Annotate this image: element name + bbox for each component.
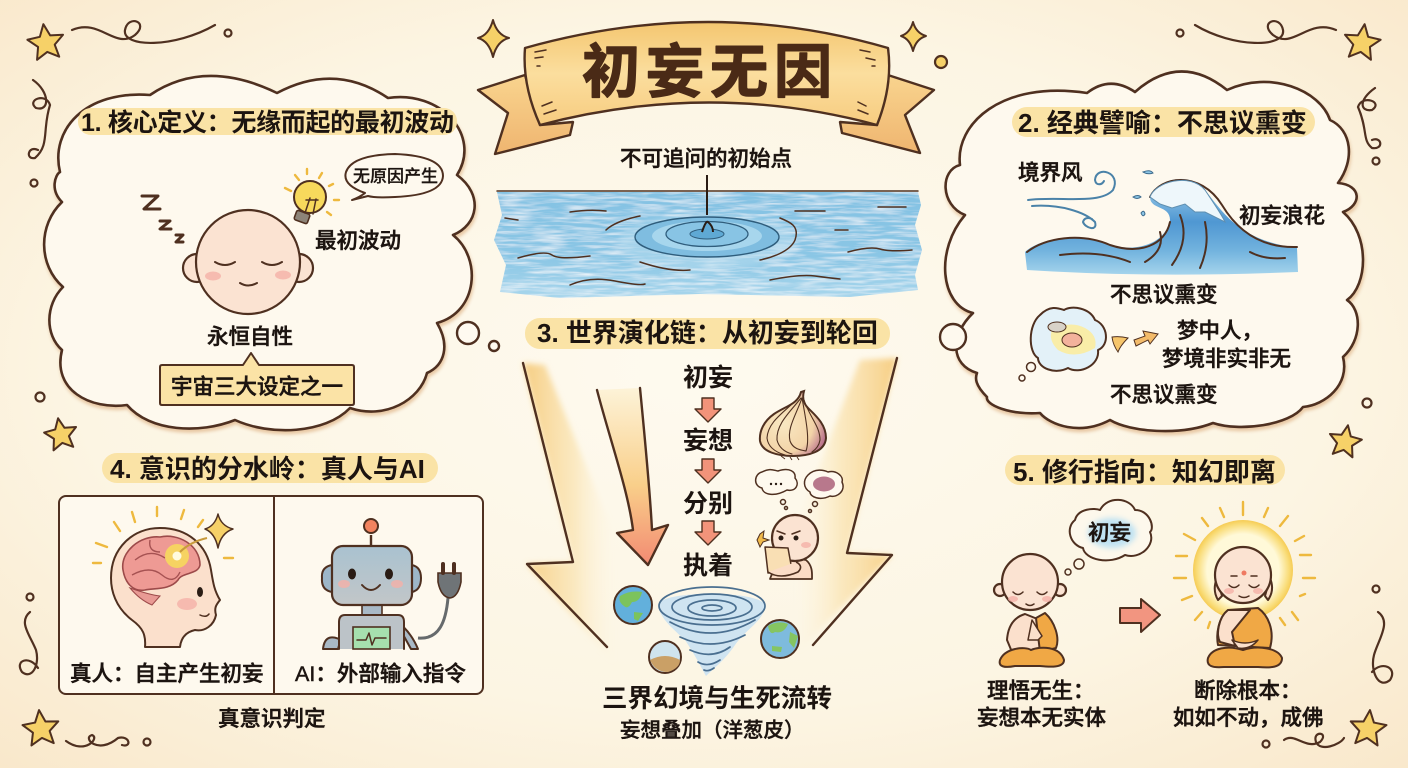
icon: wave bbox=[1025, 179, 1298, 275]
label: dream: 梦境非实非无 bbox=[1162, 347, 1291, 371]
callout text: 宇宙三大设定之一 bbox=[171, 375, 343, 399]
big arrow left bbox=[523, 363, 625, 670]
chain labels bbox=[683, 364, 733, 580]
panel: classic metaphor bbox=[940, 71, 1363, 431]
icon: praying monk bbox=[994, 554, 1066, 667]
icon: tornado bbox=[658, 587, 765, 676]
icon: human head with brain bbox=[93, 507, 233, 647]
label: inconceivable perfuming 2: 不思议熏变 bbox=[1110, 383, 1218, 407]
zzz bbox=[142, 196, 183, 242]
water scene with ripple bbox=[494, 147, 922, 298]
icon: thought cloud bbox=[1065, 500, 1152, 575]
panel 5 heading highlight bbox=[1005, 455, 1285, 485]
icon: earth 1 bbox=[614, 586, 652, 624]
thought circles bbox=[457, 322, 499, 351]
arrow 3 bbox=[695, 521, 721, 545]
panel 2 cloud outline bbox=[945, 71, 1363, 431]
panel 2 heading: 2. 经典譬喻：不思议熏变 bbox=[1018, 108, 1307, 138]
icon: onion bbox=[760, 391, 826, 460]
icon: thought clouds bbox=[756, 470, 843, 512]
thought circle bbox=[940, 324, 966, 350]
panel: practice direction bbox=[977, 455, 1324, 730]
label: delusion has no substance: 妄想本无实体 bbox=[977, 706, 1107, 730]
label: become Buddha: 如如不动，成佛 bbox=[1173, 706, 1324, 730]
icon: dream cloud bbox=[1019, 308, 1106, 381]
icon: arrow bbox=[1134, 331, 1158, 346]
sparkle left bbox=[478, 20, 509, 57]
panel 5 heading: 5. 修行指向：知幻即离 bbox=[1013, 457, 1276, 487]
banner main ribbon bbox=[525, 22, 889, 125]
label: delusion in cloud: 初妄 bbox=[1088, 521, 1131, 545]
ripples bbox=[505, 207, 912, 285]
panel: core definition bbox=[44, 76, 499, 430]
panel 4 heading: 4. 意识的分水岭：真人与AI bbox=[110, 454, 425, 484]
middle arrow bbox=[597, 388, 668, 565]
panel 1 heading highlight bbox=[78, 108, 457, 135]
arrow 2 bbox=[695, 459, 721, 483]
sparkle right bbox=[901, 22, 926, 51]
title banner bbox=[478, 20, 934, 154]
icon: star mid left bbox=[42, 415, 79, 451]
label: no cause: 无原因产生 bbox=[353, 167, 438, 186]
banner title text: 初妄无因 bbox=[582, 40, 832, 105]
label: dreamer: 梦中人， bbox=[1177, 319, 1263, 343]
big arrow right bbox=[785, 358, 897, 660]
icon: star bottom left bbox=[21, 708, 61, 746]
water surface bbox=[494, 192, 922, 298]
icon: earth 3 bbox=[649, 641, 681, 673]
label: verdict: 真意识判定 bbox=[218, 707, 326, 731]
step: delusion: 妄想 bbox=[683, 427, 733, 455]
icon: robot bbox=[322, 519, 461, 649]
label: onion skin: 妄想叠加（洋葱皮） bbox=[620, 719, 804, 742]
banner tick marks bbox=[535, 50, 875, 114]
label: first wave: 最初波动 bbox=[315, 229, 401, 253]
panel: world evolution chain bbox=[523, 318, 897, 742]
icon: small heart arrow bbox=[1112, 337, 1128, 352]
icon: light bulb bbox=[285, 169, 339, 224]
icon: enlightened monk bbox=[1174, 502, 1315, 667]
step: initial delusion: 初妄 bbox=[683, 364, 733, 392]
panel: consciousness watershed bbox=[59, 453, 483, 731]
icon: star mid right bbox=[1327, 422, 1364, 458]
wave outline bbox=[1027, 180, 1297, 268]
panel 1 cloud outline bbox=[44, 76, 475, 430]
icon: sleeping head bbox=[183, 210, 313, 314]
icon: arrow bbox=[1120, 599, 1160, 632]
pointer line bbox=[706, 175, 708, 215]
banner left tail bbox=[478, 75, 573, 154]
panel 1 heading: 1. 核心定义：无缘而起的最初波动 bbox=[81, 109, 454, 137]
caption: 不可追问的初始点 bbox=[620, 147, 792, 171]
banner right tail bbox=[840, 75, 934, 153]
callout box bbox=[160, 353, 354, 405]
step: discrimination: 分别 bbox=[683, 490, 733, 518]
comparison table bbox=[59, 496, 483, 694]
icon: clinging person bbox=[757, 515, 818, 579]
icon: star bottom right bbox=[1348, 708, 1388, 746]
arrow 1 bbox=[695, 398, 721, 422]
water drop bbox=[702, 222, 713, 232]
panel 2 heading highlight bbox=[1012, 107, 1315, 137]
icon: star top right bbox=[1342, 22, 1382, 61]
label: inconceivable perfuming: 不思议熏变 bbox=[1110, 283, 1218, 307]
panel 3 heading highlight bbox=[525, 318, 890, 349]
label: wave crest: 初妄浪花 bbox=[1239, 204, 1325, 228]
icon: star top left bbox=[26, 22, 66, 61]
horizon bbox=[497, 190, 918, 192]
icon: wind swirls bbox=[1028, 172, 1115, 228]
label: three realms: 三界幻境与生死流转 bbox=[602, 685, 832, 713]
label: AI: AI：外部输入指令 bbox=[295, 662, 466, 686]
wave foam bbox=[1150, 180, 1225, 222]
spray drops bbox=[1133, 171, 1153, 216]
step: attachment: 执着 bbox=[683, 552, 733, 580]
panel 4 heading highlight bbox=[102, 453, 438, 483]
speech bubble bbox=[345, 154, 443, 200]
label: understand no-arising: 理悟无生： bbox=[987, 679, 1095, 703]
label: cut the root: 断除根本： bbox=[1194, 679, 1302, 703]
label: human: 真人：自主产生初妄 bbox=[70, 662, 264, 686]
panel 3 heading: 3. 世界演化链：从初妄到轮回 bbox=[537, 318, 878, 348]
label: eternal nature: 永恒自性 bbox=[207, 325, 293, 349]
icon: earth 2 bbox=[761, 620, 799, 658]
label: wind: 境界风 bbox=[1018, 161, 1083, 185]
